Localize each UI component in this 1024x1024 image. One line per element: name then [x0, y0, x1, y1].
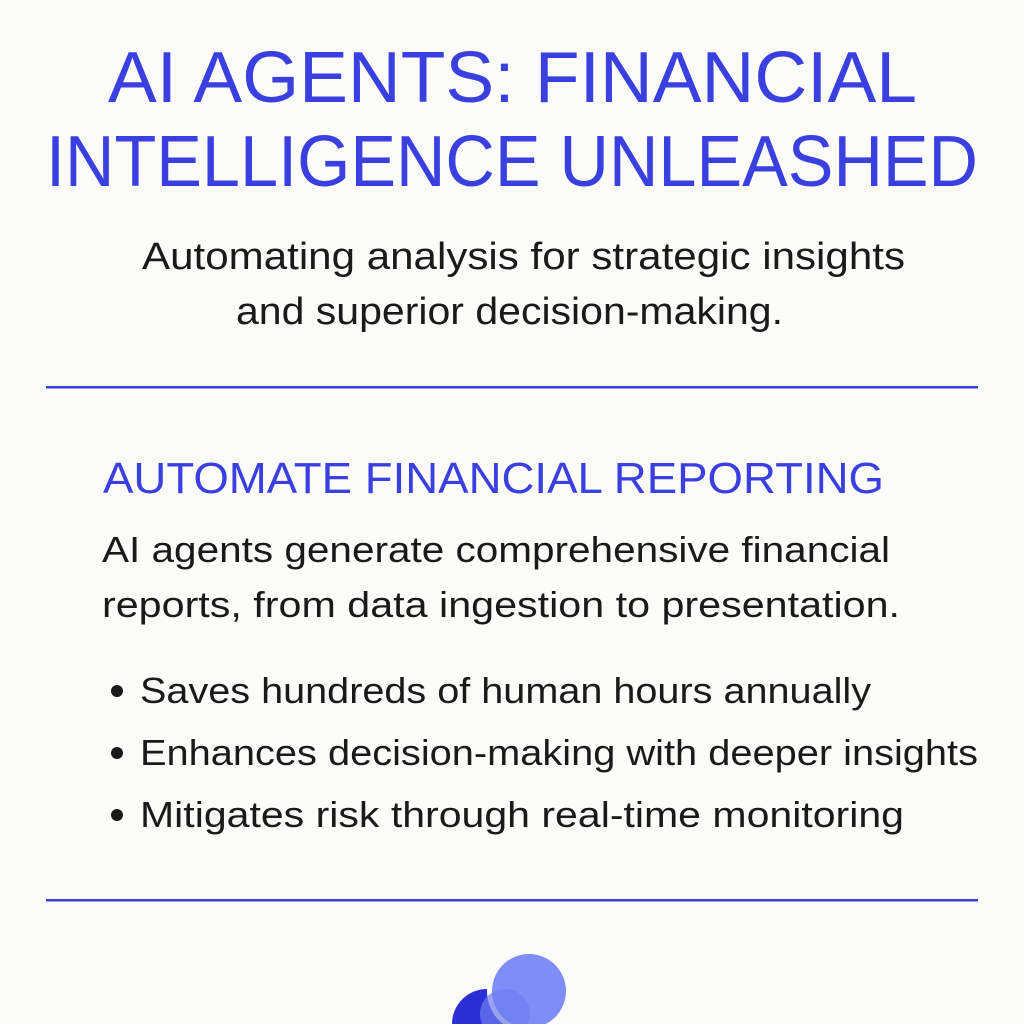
body text: AI agents generate comprehensive financial	[102, 529, 890, 570]
bullet list: Enhances decision-making with deeper insights	[140, 732, 978, 773]
title: INTELLIGENCE UNLEASHED	[46, 122, 978, 202]
body text	[102, 529, 900, 625]
title	[46, 38, 978, 202]
title: AI AGENTS: FINANCIAL	[108, 38, 917, 118]
bullet list: Mitigates risk through real-time monitoring	[140, 794, 904, 835]
subtitle: and superior decision-making.	[236, 291, 783, 333]
subtitle	[142, 236, 905, 333]
section heading: AUTOMATE FINANCIAL REPORTING	[103, 454, 884, 503]
icon: overlapping circles	[452, 949, 571, 1024]
body text: reports, from data ingestion to presentation.	[102, 584, 900, 625]
bullet list	[111, 670, 978, 835]
bullet list: Saves hundreds of human hours annually	[140, 670, 871, 711]
subtitle: Automating analysis for strategic insights	[142, 236, 905, 278]
